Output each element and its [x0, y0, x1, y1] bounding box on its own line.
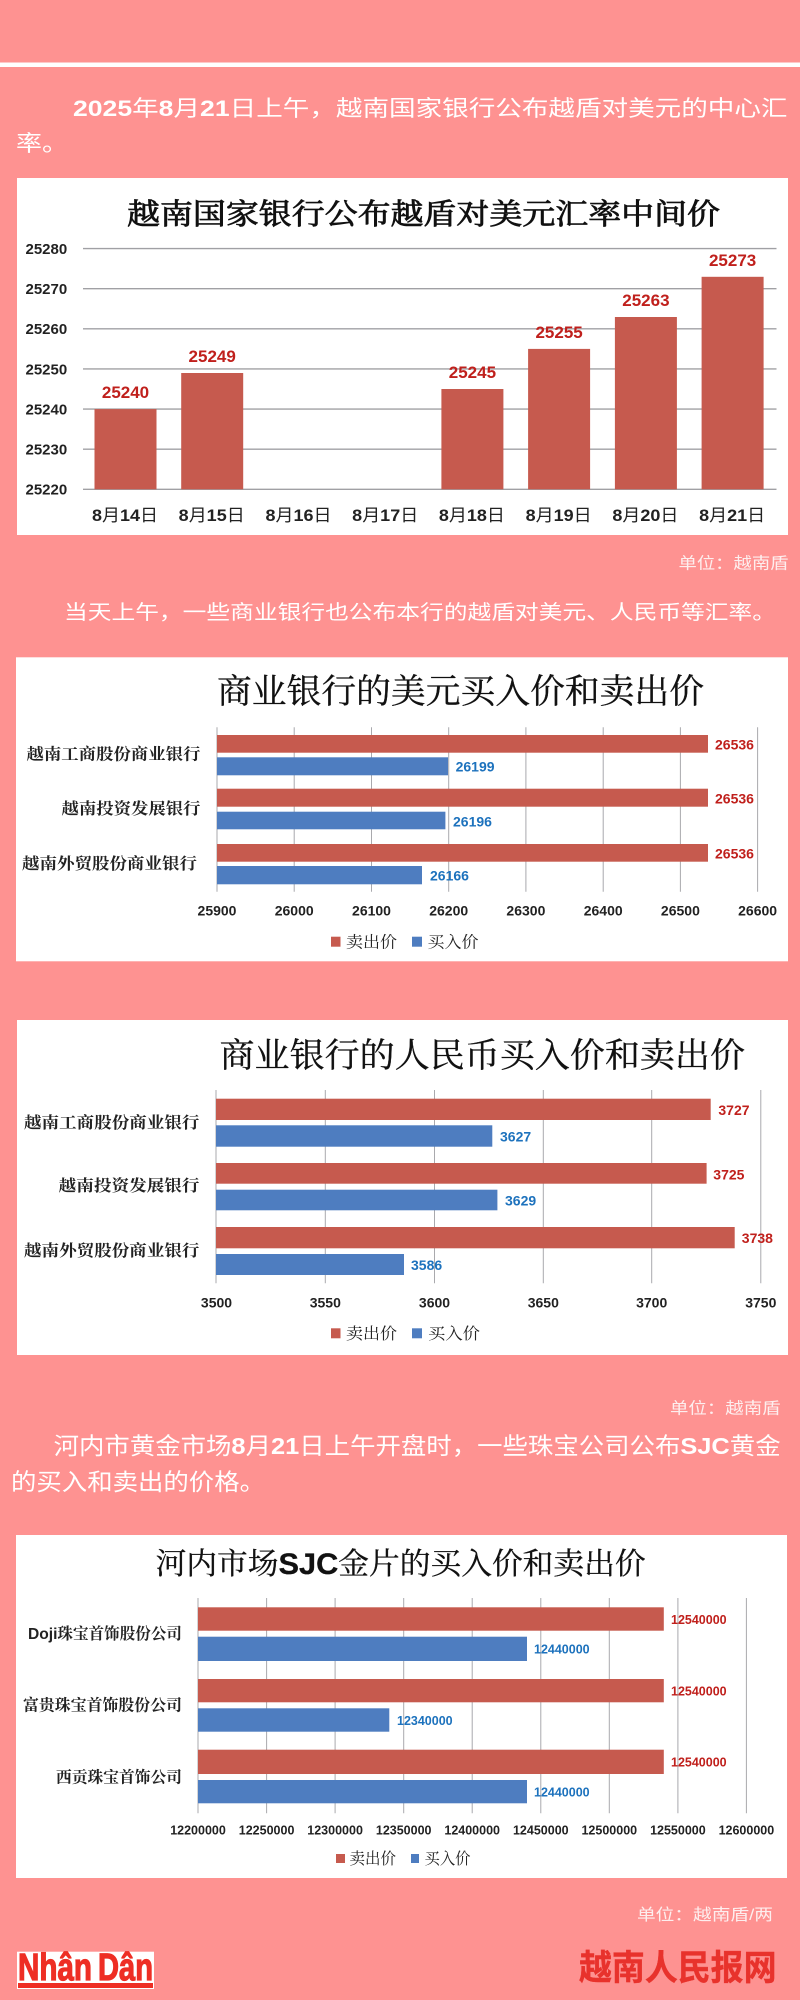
data labels: 26199	[456, 759, 495, 775]
data labels: 12540000	[671, 1613, 727, 1627]
bars with values: 25255	[535, 323, 583, 342]
legend	[331, 930, 478, 952]
data labels: 26536	[715, 791, 754, 807]
text: Hanoi gold market: 河内市黄金市场 8月21日上午开盘时，一些珠宝公司公布 SJC黄金	[54, 1433, 781, 1459]
data labels	[411, 1102, 773, 1273]
legend	[336, 1846, 470, 1869]
legend: 卖出价	[350, 1846, 396, 1869]
x axis dates: 8月15日	[179, 506, 245, 525]
x axis labels: 3700	[636, 1294, 667, 1310]
gridlines	[216, 1090, 761, 1283]
panel: central bank USD mid-rate chart	[17, 178, 788, 535]
x axis labels: 26300	[506, 903, 546, 919]
bank labels: 越南外贸股份商业银行	[24, 1241, 200, 1260]
x axis labels: 12350000	[376, 1824, 432, 1838]
x axis labels: 3500	[201, 1294, 232, 1310]
data labels: 3727	[718, 1102, 750, 1118]
data labels: 26196	[453, 814, 492, 830]
bank labels: 越南外贸股份商业银行	[22, 854, 197, 873]
text: Hanoi gold market: 的买入和卖出的价格。	[11, 1469, 265, 1495]
chart title: 越南国家银行公布越盾对美元汇率中间价	[127, 198, 720, 231]
gridlines and y axis: 25230	[26, 442, 67, 458]
unit note 2: 单位：越南盾	[670, 1399, 781, 1417]
footer brand text: 越南人民报网	[579, 1940, 776, 1991]
bank labels: 越南工商股份商业银行	[26, 744, 200, 764]
chart title: 商业银行的美元买入价和卖出价	[217, 673, 704, 711]
x axis labels: 3650	[528, 1294, 559, 1310]
x axis labels: 12600000	[719, 1824, 774, 1838]
bars	[216, 1099, 735, 1275]
bars with values: 25245	[449, 363, 496, 382]
x axis labels: 3550	[310, 1294, 341, 1310]
x axis dates: 8月16日	[266, 506, 332, 525]
text: Hanoi gold market	[11, 1433, 781, 1495]
bank labels: 越南投资发展银行	[59, 1176, 200, 1195]
x axis labels: 12250000	[239, 1824, 294, 1838]
gridlines	[217, 727, 758, 892]
intro text: central bank rate: 2025 年8月21日上午，越南国家银行公布越盾对美元的中心汇	[73, 96, 788, 121]
data labels: 3627	[500, 1129, 531, 1145]
bars	[198, 1607, 664, 1803]
panel: commercial bank USD chart	[16, 657, 788, 961]
x axis labels: 26500	[661, 903, 700, 919]
panel: commercial bank RMB chart	[17, 1020, 788, 1355]
data labels: 3725	[713, 1166, 745, 1182]
unit note 3: 单位：越南盾/两	[637, 1906, 773, 1924]
bars with values: 25263	[622, 291, 670, 310]
x axis labels: 3600	[419, 1294, 450, 1310]
data labels: 12540000	[671, 1756, 727, 1770]
data labels: 3629	[505, 1193, 536, 1209]
gridlines and y axis: 25280	[26, 241, 67, 258]
data labels: 12340000	[397, 1714, 453, 1728]
gridlines and y axis: 25250	[26, 362, 67, 378]
x axis labels: 12200000	[170, 1824, 226, 1838]
legend: 卖出价	[346, 930, 397, 952]
logo: Nhan Dan: Dân	[98, 1947, 153, 1989]
logo: Nhan Dan: Nhân	[18, 1947, 92, 1989]
bank labels: 越南投资发展银行	[62, 799, 200, 818]
legend: 卖出价	[346, 1321, 397, 1344]
text: commercial banks: 当天上午，一些商业银行也公布本行的越盾对美元、人民币等汇率。	[64, 601, 776, 624]
data labels: 12440000	[534, 1642, 590, 1656]
chart title: 商业银行的人民币买入价和卖出价	[220, 1037, 745, 1075]
x axis dates: 8月20日	[612, 506, 678, 525]
company labels	[23, 1624, 182, 1786]
unit note 1: 单位：越南盾	[678, 554, 788, 572]
x axis dates: 8月18日	[439, 506, 505, 525]
panel: SJC gold chart	[16, 1535, 787, 1878]
x axis labels	[170, 1824, 774, 1838]
bank labels: 越南工商股份商业银行	[24, 1113, 200, 1132]
bars	[217, 735, 708, 884]
legend: 买入价	[428, 930, 478, 952]
data labels	[430, 736, 754, 884]
x axis labels: 12450000	[513, 1824, 569, 1838]
x axis labels: 26000	[275, 903, 314, 919]
company labels: 富贵珠宝首饰股份公司	[23, 1696, 182, 1715]
legend	[331, 1321, 480, 1344]
gridlines	[198, 1598, 746, 1813]
data labels: 26166	[430, 868, 469, 884]
bars with values: 25249	[189, 347, 236, 366]
x axis labels: 26400	[584, 903, 623, 919]
logo: Nhan Dan	[17, 1947, 154, 1989]
x axis labels: 26600	[738, 903, 777, 919]
bars with values: 25240	[102, 383, 149, 402]
x axis dates: 8月17日	[352, 506, 418, 525]
bars with values	[94, 251, 764, 489]
data labels: 12440000	[534, 1786, 590, 1800]
bank labels	[22, 744, 200, 873]
data labels	[397, 1613, 727, 1800]
chart title: 河内市场SJC金片的买入价和卖出价	[156, 1548, 646, 1581]
company labels: 西贡珠宝首饰公司	[56, 1767, 182, 1786]
x axis labels: 26200	[429, 903, 468, 919]
x axis labels	[201, 1294, 777, 1310]
x axis dates: 8月21日	[699, 506, 765, 525]
gridlines and y axis: 25220	[26, 482, 67, 499]
legend: 买入价	[428, 1321, 480, 1344]
data labels: 26536	[715, 845, 754, 861]
data labels: 12540000	[671, 1684, 727, 1698]
bank labels	[24, 1113, 200, 1260]
data labels: 26536	[715, 736, 754, 752]
gridlines and y axis: 25260	[26, 321, 67, 338]
x axis labels: 12500000	[581, 1824, 637, 1838]
gridlines and y axis: 25240	[26, 402, 67, 418]
x axis dates: 8月14日	[92, 506, 158, 525]
intro text: central bank rate: 率。	[16, 131, 68, 156]
x axis labels: 12400000	[444, 1824, 500, 1838]
data labels: 3586	[411, 1257, 442, 1273]
x axis labels: 26100	[352, 903, 391, 919]
x axis labels: 25900	[198, 903, 237, 919]
x axis dates	[92, 506, 765, 525]
gridlines and y axis: 25270	[26, 281, 67, 298]
x axis labels: 12550000	[650, 1824, 706, 1838]
company labels: Doji珠宝首饰股份公司	[28, 1624, 182, 1643]
data labels: 3738	[742, 1230, 773, 1246]
bars with values: 25273	[709, 251, 756, 270]
x axis labels: 12300000	[307, 1824, 363, 1838]
x axis labels: 3750	[745, 1294, 777, 1310]
intro text: central bank rate	[16, 96, 788, 156]
x axis labels	[198, 903, 777, 919]
legend: 买入价	[424, 1846, 470, 1869]
gridlines and y axis	[26, 241, 776, 499]
x axis dates: 8月19日	[526, 506, 592, 525]
